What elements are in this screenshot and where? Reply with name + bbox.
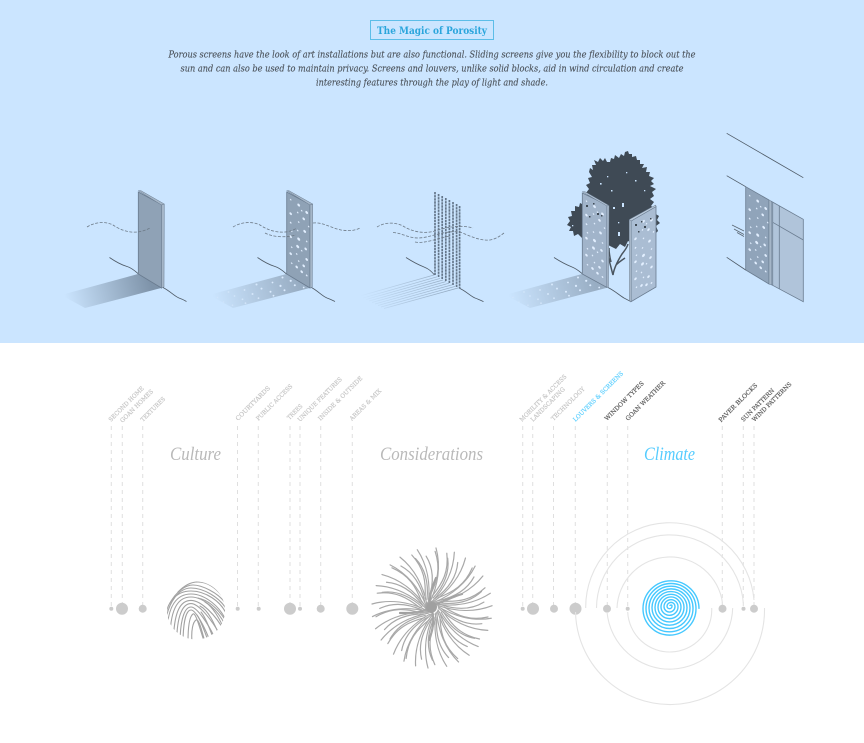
rotated topic labels: climate: LOUVERS & SCREENS	[572, 370, 625, 423]
tree	[567, 151, 660, 275]
timeline dots	[109, 603, 758, 615]
rotated topic labels: culture and considerations: TEXTURES	[139, 396, 167, 423]
rotated topic labels: culture and considerations: AREAS & MIX	[348, 387, 384, 423]
rotated topic labels: climate: TECHNOLOGY	[550, 385, 587, 422]
radial burst: considerations	[372, 548, 492, 668]
diagram: perforated screen	[209, 191, 360, 308]
rotated topic labels: climate: PAVER BLOCKS	[717, 382, 759, 424]
top panel background	[0, 0, 864, 343]
dashed leader lines	[111, 426, 754, 606]
rotated topic labels: culture and considerations: GOAN HOMES	[119, 388, 155, 424]
title box	[370, 20, 494, 40]
concentric arcs: climate	[576, 523, 765, 705]
rotated topic labels: climate: WIND PATTERNS	[751, 381, 793, 423]
title box: The Magic of Porosity	[377, 25, 488, 37]
intro paragraph: Porous screens have the look of art installations but are also functional. Sliding screens give you the flexibility to block out the	[168, 50, 696, 60]
rotated topic labels: climate: MOBILITY & ACCESS	[518, 373, 568, 423]
heading: Climate: Climate	[644, 444, 695, 465]
heading: Considerations: Considerations	[380, 444, 483, 465]
rotated topic labels: culture and considerations: TREES	[286, 403, 304, 421]
rotated topic labels: culture and considerations	[107, 375, 384, 424]
rotated topic labels: climate: WINDOW TYPES	[603, 380, 646, 422]
fingerprint: culture	[167, 582, 225, 640]
intro paragraph: interesting features through the play of light and shade.	[316, 78, 548, 88]
diagram: solid screen	[61, 191, 186, 308]
intro paragraph: sun and can also be used to maintain privacy. Screens and louvers, unlike solid blocks, aid in wind circulation and create	[180, 64, 684, 74]
rotated topic labels: culture and considerations: PUBLIC ACCESS	[255, 383, 294, 422]
rotated topic labels: climate: SUN PATTERN	[740, 387, 776, 423]
heading: Culture: Culture	[170, 444, 221, 465]
diagram: screens with tree	[505, 151, 660, 308]
diagram: louvers	[360, 192, 504, 308]
rotated topic labels: climate: GOAN WEATHER	[624, 380, 667, 422]
spiral: climate	[643, 581, 699, 635]
intro paragraph	[168, 50, 696, 88]
rotated topic labels: culture and considerations: INSIDE & OUTSIDE	[317, 375, 364, 422]
rotated topic labels: culture and considerations: COURTYARDS	[234, 385, 272, 422]
rotated topic labels: culture and considerations: UNIQUE FEATURES	[296, 376, 344, 423]
rotated topic labels: climate	[518, 370, 793, 424]
diagram: sliding screen in building	[727, 133, 803, 302]
rotated topic labels: climate: LANDSCAPING	[529, 386, 567, 423]
rotated topic labels: culture and considerations: SECOND HOME	[107, 385, 146, 423]
